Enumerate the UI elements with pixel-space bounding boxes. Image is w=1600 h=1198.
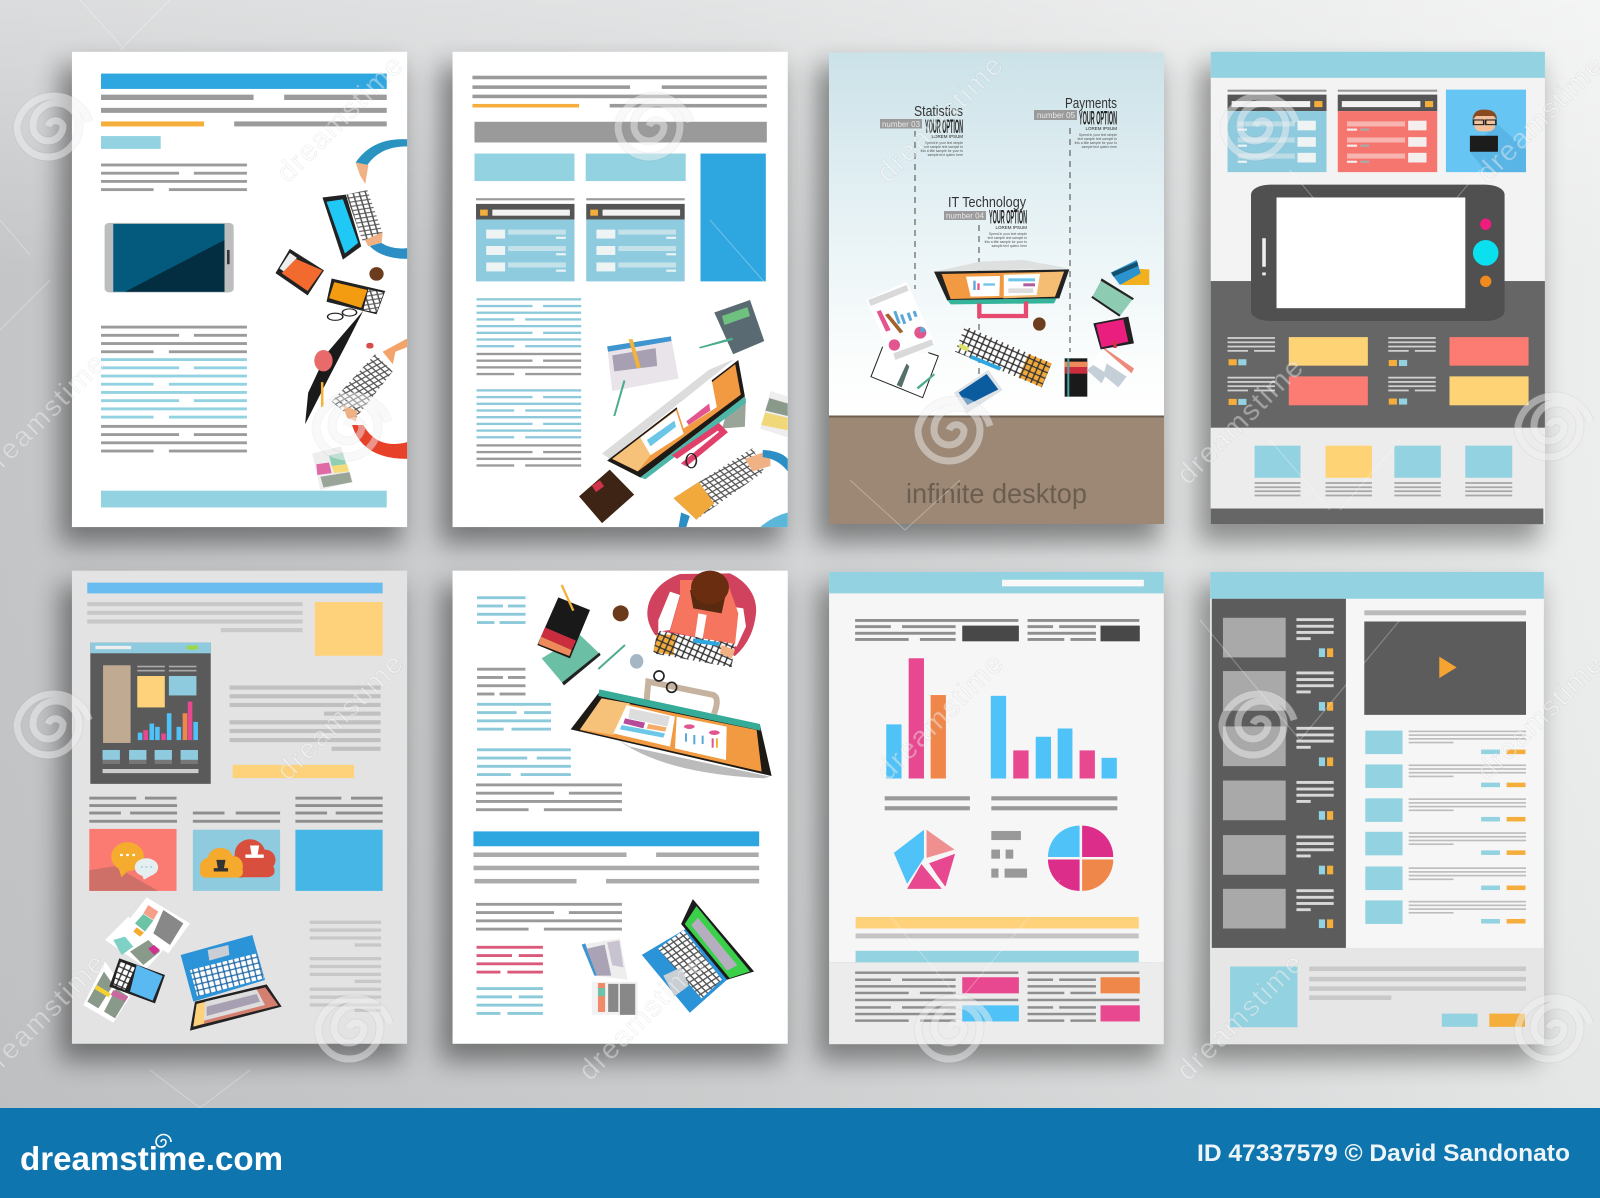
icon: tablet device	[1251, 185, 1505, 321]
callout: IT technology: IT Technology	[948, 194, 1026, 211]
intro text	[855, 619, 1140, 641]
callout: statistics: LOREM IPSUM	[931, 134, 963, 139]
footer section	[1230, 967, 1526, 1027]
page 6: white flyer with workstation	[440, 571, 788, 1061]
page 3: infinite desktop poster: YOUR OPTION	[1079, 108, 1117, 130]
text columns	[101, 326, 247, 452]
dashed leader lines	[915, 128, 1070, 375]
page 7: charts report	[817, 572, 1164, 1061]
header lines	[472, 76, 767, 142]
blue heading bar	[473, 831, 759, 846]
callout: payments: Spend in your text simple	[1079, 133, 1117, 137]
callout: statistics: number 03	[882, 119, 920, 129]
page 3: infinite desktop poster: YOUR OPTION	[989, 208, 1027, 228]
illustration: person at workstation	[537, 571, 772, 778]
card: salmon	[1338, 90, 1437, 172]
callout: payments: this a title sample for your to	[1075, 141, 1117, 145]
sidebar	[1212, 599, 1346, 948]
footer bar	[0, 1108, 1600, 1198]
watermark: spirals and diagonal text: dreamstime	[270, 50, 410, 189]
heading: infinite desktop: infinite desktop	[906, 478, 1087, 509]
page 8: video layout	[1198, 572, 1544, 1061]
text block	[101, 164, 247, 191]
bar chart: right	[991, 696, 1117, 778]
credit line: ID 47337579 © David Sandonato	[1197, 1140, 1570, 1167]
pie chart	[1048, 826, 1113, 891]
bar chart: left	[886, 658, 946, 778]
illustration: desk with laptops	[276, 139, 407, 490]
callout: statistics: text sample text sample to	[924, 145, 963, 149]
header lines	[101, 74, 387, 149]
bottom tiles	[1255, 446, 1512, 496]
callout: payments: sample text quiero here	[1082, 145, 1117, 149]
tile captions	[1228, 337, 1436, 405]
page 5: grey report	[60, 571, 407, 1061]
watermark: spirals and diagonal text: dreamstime	[870, 648, 1010, 787]
callout: statistics: Spend in your text simple	[925, 141, 963, 145]
text columns	[476, 596, 622, 811]
callout: payments: text sample text sample to	[1078, 137, 1117, 141]
callout: payments: LOREM IPSUM	[1085, 126, 1117, 131]
callout: IT technology: LOREM IPSUM	[995, 225, 1027, 230]
header	[87, 583, 383, 656]
callout: IT technology: this a title sample for your to	[985, 240, 1027, 244]
video player	[1364, 610, 1526, 715]
footer bar	[101, 491, 387, 507]
callout: IT technology: sample text quiero here	[992, 244, 1027, 248]
page 2: monitor flyer	[440, 52, 788, 544]
banners	[856, 917, 1139, 962]
legend	[991, 831, 1027, 878]
illustration: devices and papers	[83, 897, 282, 1031]
callout: statistics	[880, 103, 963, 157]
text column	[477, 298, 581, 467]
icon: chat bubbles	[89, 829, 177, 891]
lead text	[473, 852, 759, 883]
icon: tablet	[105, 223, 234, 292]
dashboard panel	[90, 643, 211, 784]
callout: IT technology: Spend in your text simple	[989, 232, 1027, 236]
callout: statistics: this a title sample for your to	[921, 149, 963, 153]
column text	[89, 797, 383, 823]
text block lower right	[310, 921, 381, 1012]
lower text	[476, 903, 622, 1015]
page 3: infinite desktop poster	[817, 52, 1164, 542]
watermark: spirals and diagonal text: dreamstime	[270, 648, 410, 787]
list items	[1365, 731, 1526, 924]
card: right	[586, 198, 685, 281]
callout: payments	[1034, 95, 1117, 149]
text block right	[230, 686, 381, 751]
card: left	[476, 198, 574, 281]
chart captions	[885, 796, 1117, 810]
illustration: desktop seen from above	[867, 260, 1149, 413]
illustration: monitor and keyboard	[579, 300, 788, 527]
watermark: spirals and diagonal text: dreamstime	[1170, 352, 1310, 491]
watermark: spirals and diagonal text: dreamstime	[572, 948, 712, 1087]
watermark: spirals and diagonal text: dreamstime	[870, 50, 1010, 189]
blue tile	[295, 830, 383, 891]
footer text and tiles	[855, 971, 1140, 1022]
colour blocks	[474, 154, 766, 281]
page bands	[1211, 52, 1545, 524]
callout: IT technology	[944, 194, 1027, 248]
callout: IT technology: text sample text sample to	[988, 236, 1027, 240]
logo: dreamstime.com: dreamstime.com	[20, 1140, 283, 1177]
callout: statistics: Statistics	[914, 103, 963, 120]
footer band	[829, 416, 1164, 524]
colour tiles	[1289, 337, 1529, 405]
icon: avatar	[1446, 90, 1526, 172]
callout: statistics: sample text quiero here	[928, 153, 963, 157]
callout: IT technology: number 04	[946, 210, 984, 220]
callout: payments: number 05	[1037, 110, 1075, 120]
icon: user clouds	[193, 830, 280, 891]
page 3: infinite desktop poster: YOUR OPTION	[925, 117, 963, 138]
pentagon chart	[894, 830, 955, 889]
illustration: laptop and papers	[582, 899, 754, 1015]
card: blue	[1228, 90, 1327, 172]
page 4: tablet UI layout	[1199, 52, 1545, 542]
header band	[829, 572, 1164, 593]
watermark: spirals and diagonal text: dreamstime	[1170, 948, 1310, 1087]
yellow bar	[233, 765, 354, 778]
header band	[1210, 572, 1544, 599]
page 1: tablet flyer	[60, 52, 407, 544]
callout: payments: Payments	[1065, 95, 1117, 112]
